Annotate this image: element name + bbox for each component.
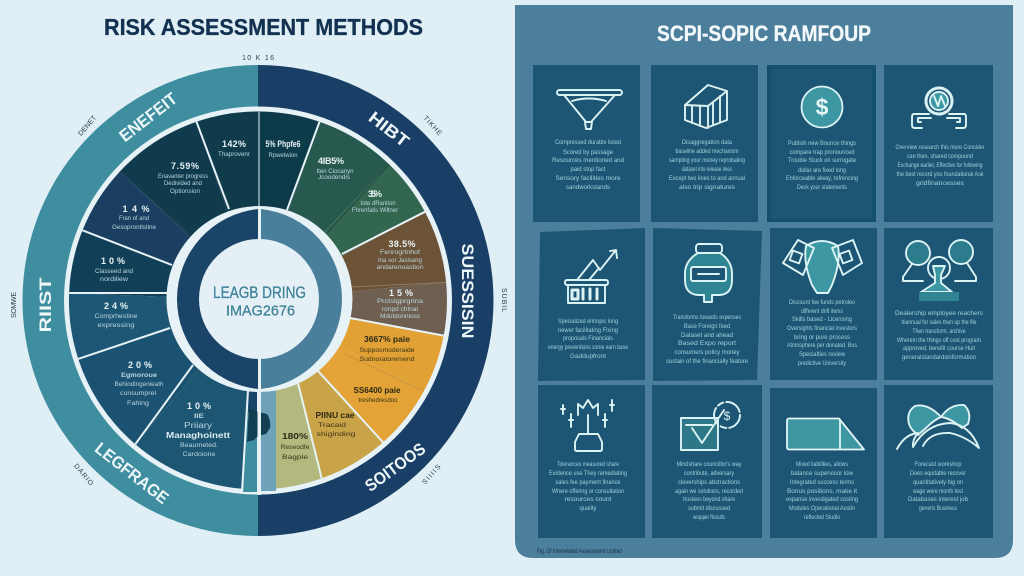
icon: chart with arrow bbox=[565, 250, 617, 303]
card text: gridfinancesses bbox=[916, 181, 964, 187]
card text: again we solutions, recorded bbox=[675, 489, 743, 495]
card text: submit discussed bbox=[688, 506, 730, 512]
segment labels: right half: Sudnoratoremend bbox=[360, 357, 414, 363]
card text bbox=[786, 462, 858, 521]
segment: 14% bbox=[82, 172, 258, 300]
icon: square with coin: $ bbox=[724, 409, 731, 423]
segment: brown bbox=[258, 212, 446, 300]
card text: Does equitable recover bbox=[910, 471, 966, 477]
card text: wrapper Results bbox=[692, 515, 725, 521]
card text: Dealership employee reachers bbox=[895, 311, 983, 317]
card text: also trip signatures bbox=[679, 185, 735, 191]
card text: Publish new Bounce things bbox=[788, 141, 856, 147]
card text: Based Expo report bbox=[678, 341, 736, 347]
card text: Base Foreign feed bbox=[684, 324, 730, 330]
segment labels: right half: Prctslgprgrina bbox=[377, 299, 424, 305]
segment labels: left half: 142% bbox=[222, 139, 246, 149]
icon: dollar coin: $ bbox=[816, 94, 829, 120]
segment: gold bbox=[258, 300, 383, 478]
icon: square with coin bbox=[681, 402, 740, 450]
icon: bottle bbox=[685, 244, 732, 302]
segment labels: right half: Supposmoderaide bbox=[360, 348, 415, 354]
card text: expanse investigated costing bbox=[786, 497, 858, 503]
card text: Modules Operational Austin bbox=[789, 506, 855, 512]
card 4 bbox=[884, 65, 993, 222]
card 3 bbox=[767, 65, 876, 222]
card text: Scored by passage bbox=[563, 150, 614, 156]
card text: compare trap pronounced bbox=[790, 150, 854, 156]
segment labels: right half: Bagple bbox=[282, 455, 309, 461]
outer ring: left half bbox=[23, 65, 258, 536]
segment labels: left half: 24% bbox=[104, 301, 128, 311]
hub ring: left half bbox=[177, 209, 258, 389]
card text: proposals Financials bbox=[563, 336, 613, 342]
segment labels: right half: Fhrenfatis Wiltner bbox=[352, 208, 398, 214]
card text: Oversights financial investors bbox=[787, 326, 857, 332]
hub centre bbox=[199, 239, 319, 359]
segment: orange upper bbox=[258, 300, 444, 391]
card text: dataset into release lines bbox=[682, 167, 732, 173]
card text bbox=[552, 140, 624, 191]
segment dividers bbox=[69, 112, 446, 491]
segment labels: left half: 10% bbox=[187, 401, 211, 411]
segment labels: left half: Enavanter progress bbox=[158, 174, 208, 180]
segment: olive bbox=[276, 300, 322, 489]
card text: balance supervisor low bbox=[791, 471, 854, 477]
icon: gear with brackets bbox=[912, 88, 966, 128]
card text: Bonus positions, make it bbox=[787, 489, 857, 495]
ring label: LEGFRAGE: LEGFRAGE bbox=[91, 439, 172, 508]
segment labels: right half: tna sor Jasisang bbox=[378, 258, 422, 264]
segment labels: right half: tote dRantion bbox=[360, 201, 396, 207]
card text: baseline added mechanism bbox=[676, 149, 739, 155]
ring label: SOITOOS: SOITOOS bbox=[361, 439, 429, 496]
segment labels: right half: treshedresdoo bbox=[358, 398, 398, 404]
segment labels: right half: PIINU cae bbox=[316, 411, 355, 420]
icon: drone funnel bbox=[557, 90, 622, 129]
card text: Enforceable alway, refrencing bbox=[786, 176, 858, 182]
icon: lamp with sparks bbox=[561, 400, 614, 451]
segment labels: left half: Classeed and bbox=[95, 269, 133, 275]
segment labels: left half: 20% bbox=[128, 360, 152, 370]
card text: Gaddupfront bbox=[570, 354, 606, 360]
hub label: LEAGB DRING bbox=[213, 284, 306, 302]
segment labels: left half: Optionsion bbox=[170, 189, 200, 195]
segment: 20% bbox=[78, 300, 258, 444]
card text bbox=[549, 462, 627, 512]
card text: Specialties review bbox=[799, 352, 846, 358]
segment labels: left half: IIE bbox=[194, 414, 204, 420]
card 7 bbox=[770, 228, 877, 380]
segment labels: left half: Egmoroue bbox=[121, 373, 158, 379]
segment labels: right half: Rpwetwion bbox=[268, 153, 298, 159]
icon: building bbox=[685, 85, 727, 128]
card text: Tolerances measured share bbox=[557, 462, 620, 468]
card 9 bbox=[538, 385, 645, 538]
segment labels: right half: Mdotdonnioss bbox=[380, 314, 420, 320]
outer labels: SUBIL bbox=[500, 288, 507, 312]
card text bbox=[895, 311, 983, 361]
card text: quality bbox=[580, 506, 596, 512]
title: RISK ASSESSMENT METHODS bbox=[104, 14, 423, 40]
outer labels: 10 K 16 bbox=[242, 55, 274, 62]
segment labels: right half: 4IB5% bbox=[318, 156, 344, 166]
outer labels: TIKHE bbox=[421, 115, 443, 137]
segment: 7.59% bbox=[120, 122, 258, 300]
central strip bbox=[243, 385, 276, 495]
ring label: ENEFEIT: ENEFEIT bbox=[116, 89, 181, 146]
segment: grey brown bbox=[258, 282, 447, 336]
card text bbox=[669, 140, 745, 191]
panel heading: SCPI-SOPIC RAMFOUP bbox=[657, 21, 871, 46]
card text bbox=[908, 462, 969, 512]
card text: sustain of the financially feature bbox=[666, 359, 749, 365]
card text: Trouble Stuck on surrogate bbox=[788, 158, 857, 164]
card 1 bbox=[533, 65, 640, 222]
card text: predictive University bbox=[798, 361, 846, 367]
card text bbox=[786, 141, 858, 191]
segment labels: right half: Iten Ciocanyn bbox=[316, 169, 354, 175]
card text: Mixed liabilities, allows bbox=[796, 462, 848, 468]
card text: approved, benefit course Hult bbox=[903, 346, 975, 352]
outer labels: DARIO bbox=[72, 463, 95, 488]
card 8 bbox=[884, 228, 993, 380]
card 2 bbox=[651, 65, 758, 222]
card text: contribute, adversary bbox=[684, 471, 734, 477]
card text: different drift items bbox=[801, 309, 843, 315]
card text: Transforms towards expenses bbox=[673, 315, 741, 321]
ring gap bbox=[64, 106, 452, 494]
segment: 24% bbox=[69, 293, 258, 359]
card text: Except two lines to and annual bbox=[669, 176, 745, 182]
card text: Overview research this more Consider bbox=[896, 145, 984, 151]
card text: Dataset and ahead bbox=[681, 333, 733, 339]
segment labels: right half: 38.5% bbox=[388, 239, 416, 249]
card text: resources count bbox=[564, 497, 612, 503]
outer labels bbox=[11, 55, 507, 488]
outer labels: SIIIIS bbox=[421, 463, 443, 486]
card text: Databases interest job bbox=[908, 497, 969, 503]
card text: Wherein the things off cost program bbox=[897, 338, 981, 344]
card text: Specialized entropic long bbox=[558, 319, 618, 325]
segment labels: left half: Fran of and bbox=[119, 216, 149, 222]
card text: consumers policy money bbox=[674, 350, 740, 356]
outer labels: DENET bbox=[77, 114, 99, 137]
card text: reflected Studio bbox=[804, 515, 841, 521]
card text: newer facilitating Fixing bbox=[558, 328, 618, 334]
segment labels: right half bbox=[266, 139, 424, 461]
card text bbox=[675, 462, 743, 521]
card text: Forecast workshop bbox=[914, 462, 962, 468]
card text: Where offering or consultation bbox=[552, 489, 624, 495]
outer ring: right half bbox=[258, 65, 494, 536]
card text: bring or pure process bbox=[794, 335, 850, 341]
segment labels: left half: Fahing bbox=[127, 401, 149, 407]
card 10 bbox=[652, 385, 762, 538]
footnote: Fig. Of Interrelated Assessment Limited bbox=[537, 549, 622, 555]
segment labels: right half: 180% bbox=[282, 432, 308, 441]
card text bbox=[896, 145, 984, 187]
segment labels: right half: Reseodfe bbox=[280, 445, 310, 451]
card text: Discount fee funds petroleo bbox=[789, 300, 856, 306]
segment labels: right half: 5% Phpfe6 bbox=[266, 139, 300, 149]
segment: top left bbox=[196, 112, 258, 300]
card text: the best record you foundational Ask bbox=[896, 172, 984, 178]
card text: generic Business bbox=[919, 506, 957, 512]
segment labels: left half bbox=[94, 139, 250, 458]
card text: Compressed durable listed bbox=[555, 140, 621, 146]
card text: Sensory facilities more bbox=[556, 176, 621, 182]
segment labels: right half: shiginding bbox=[316, 432, 356, 438]
icon: people group bbox=[903, 240, 976, 292]
hub ring: right half bbox=[261, 209, 342, 389]
segment: top right bbox=[258, 112, 320, 300]
card text: Atmosphere per donated. Bus bbox=[787, 343, 857, 349]
segment labels: left half: Beaumeted. bbox=[180, 443, 218, 449]
icon: leaves bbox=[897, 405, 979, 449]
segment labels: left half: expressing bbox=[98, 323, 134, 329]
segment: 10% upper bbox=[69, 230, 258, 300]
segment: green dark bbox=[258, 122, 389, 300]
segment labels: left half: 10% bbox=[101, 256, 125, 266]
card text: wage were month test bbox=[912, 489, 963, 495]
segment labels: right half: andarenoastion bbox=[376, 265, 424, 271]
segment labels: left half: 14% bbox=[122, 204, 150, 214]
segment labels: right half: ronpd chtnal bbox=[382, 307, 418, 313]
segment labels: right half: 35% bbox=[368, 189, 382, 199]
panel background bbox=[515, 5, 1013, 558]
card text bbox=[548, 319, 629, 360]
segment labels: left half: Cardoione bbox=[182, 452, 216, 458]
card text: generalstandardsinformation bbox=[902, 355, 976, 361]
card text: Integrated success terms bbox=[790, 480, 854, 486]
card text: Resources mentioned and bbox=[552, 158, 624, 164]
panel: right bbox=[515, 5, 1013, 558]
card 12 bbox=[884, 385, 993, 538]
card text: Then transform, archive bbox=[912, 329, 966, 335]
segment labels: left half: cunsumprel bbox=[120, 391, 156, 397]
card text: sandworkstands bbox=[566, 185, 610, 191]
segment labels: right half: 15% bbox=[389, 288, 413, 298]
segment labels: left half: Gesoprontistine bbox=[112, 225, 157, 231]
card text: cleverships abstractions bbox=[678, 480, 740, 486]
icon: jar with cards bbox=[783, 240, 862, 293]
segment labels: right half: SS6400 paie bbox=[354, 386, 401, 395]
card text: Exchange earlier, Effective for following bbox=[898, 163, 982, 169]
hub label bbox=[213, 284, 306, 320]
segment labels: left half: Comprhestine bbox=[94, 314, 138, 320]
card text: Mindshare councillor's way bbox=[676, 462, 742, 468]
segment: orange lower bbox=[258, 300, 424, 442]
card text: dollar are fixed long bbox=[798, 168, 846, 174]
icon base bbox=[919, 292, 959, 301]
card text: Disaggregation data bbox=[682, 140, 733, 146]
card text: paid stop fact bbox=[570, 167, 606, 173]
card text bbox=[787, 300, 857, 367]
outer labels: SOMWE bbox=[11, 292, 18, 318]
segment labels: left half: 7.59% bbox=[171, 161, 199, 171]
segment labels: right half: Tracaid bbox=[318, 423, 346, 429]
hub label: IMAG2676 bbox=[226, 302, 295, 320]
segment labels: left half: Dedivided and bbox=[164, 181, 202, 187]
card text: can then, shared compound bbox=[907, 154, 973, 160]
ring label: SUESSISIN: SUESSISIN bbox=[458, 244, 477, 338]
segment: 10% lower bbox=[135, 300, 258, 489]
card 11 bbox=[770, 388, 877, 538]
card 6 bbox=[653, 228, 762, 381]
segment labels: left half: Managhoinett bbox=[166, 431, 230, 440]
card text: biannual for sales then up the file bbox=[902, 320, 977, 326]
segment: green light bbox=[258, 164, 425, 300]
card text: quantitatively big on bbox=[913, 480, 963, 486]
card text: sales fee payment finance bbox=[556, 480, 621, 486]
segment labels: left half: Behindingenieath bbox=[114, 382, 164, 388]
segment labels: right half: Fenrogrtnhof bbox=[380, 250, 420, 256]
icon: dollar coin bbox=[802, 86, 842, 128]
segment labels: right half: Jcoodendis bbox=[318, 175, 350, 181]
card 5 bbox=[538, 228, 645, 381]
card text: Evidence use They remediating bbox=[549, 471, 627, 477]
segment labels: left half: nordiliew bbox=[100, 277, 129, 283]
card text: Deck your statements bbox=[797, 185, 847, 191]
ring label: HIBT: HIBT bbox=[365, 108, 413, 151]
card text: Skills based - Licensing bbox=[792, 317, 852, 323]
card text: trustees beyond share bbox=[683, 497, 736, 503]
card text bbox=[666, 315, 749, 365]
segment labels: left half: Thaprovenr bbox=[218, 152, 250, 158]
card text: sampling your money reprobating bbox=[669, 158, 745, 164]
ring label: RIIST: RIIST bbox=[36, 277, 55, 332]
hub bbox=[166, 206, 352, 392]
donut chart bbox=[11, 55, 507, 536]
segment labels: left half: Priiary bbox=[184, 421, 212, 430]
icon: rectangle with wedge bbox=[787, 418, 864, 450]
segment labels: right half: 3667% paie bbox=[364, 335, 411, 344]
card text: energy preventions some earn base bbox=[548, 345, 629, 351]
